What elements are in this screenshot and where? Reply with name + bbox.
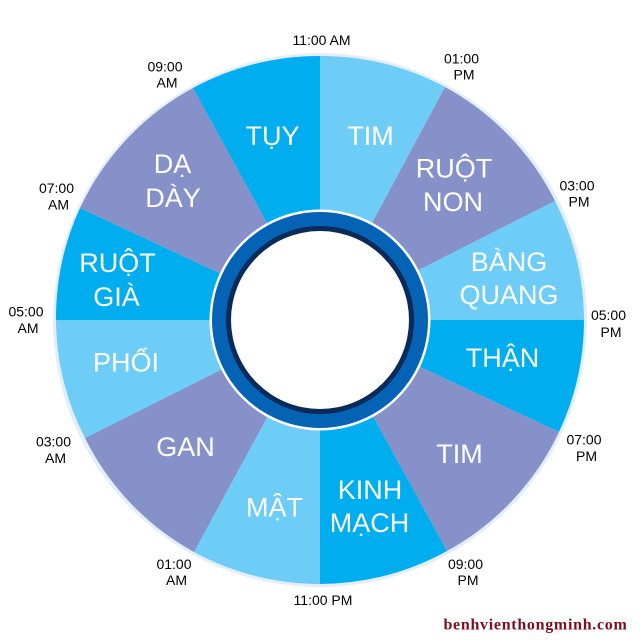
- time labels: 07:00: [39, 180, 74, 196]
- organ labels: QUANG: [459, 280, 559, 310]
- time labels: PM: [454, 66, 474, 82]
- segment: PHỔI: [56, 320, 320, 438]
- time labels: PM: [458, 572, 478, 588]
- time labels: 11:00 AM: [292, 32, 351, 48]
- time labels: AM: [45, 450, 66, 466]
- time labels: AM: [18, 320, 38, 336]
- organ labels: NON: [423, 187, 483, 217]
- time labels: 07:00: [566, 432, 602, 448]
- organ labels: MẬT: [246, 492, 303, 522]
- organ labels: DÀY: [145, 183, 201, 213]
- organ labels: [79, 121, 559, 538]
- segment: TIM: [320, 56, 445, 320]
- organ labels: GIÀ: [93, 282, 140, 312]
- segment: TỤY: [193, 56, 320, 320]
- segment: MẬT: [194, 320, 320, 584]
- time labels: PM: [600, 324, 622, 340]
- time labels: PM: [576, 448, 597, 464]
- organ labels: KINH: [338, 475, 402, 505]
- organ labels: PHỔI: [93, 346, 159, 378]
- segment: GAN: [85, 320, 320, 552]
- organ labels: TỤY: [246, 121, 300, 151]
- organ labels: MẠCH: [330, 508, 409, 538]
- segment: TIM: [320, 320, 559, 551]
- organ labels: RUỘT: [79, 247, 156, 278]
- organ labels: THẬN: [466, 342, 539, 373]
- time labels: 11:00 PM: [294, 592, 352, 608]
- segment: BÀNG QUANG: [320, 201, 584, 320]
- organ labels: DẠ: [154, 149, 191, 179]
- time labels: AM: [48, 196, 69, 212]
- segment: THẬN: [320, 320, 584, 432]
- time labels: PM: [568, 194, 590, 210]
- center hub: [210, 210, 430, 430]
- organ labels: GAN: [156, 432, 215, 462]
- organ labels: TIM: [436, 439, 483, 469]
- time labels: 03:00: [559, 178, 595, 194]
- time labels: 03:00: [36, 434, 71, 450]
- time labels: AM: [156, 74, 178, 90]
- time labels: 09:00: [448, 556, 483, 572]
- segment: KINH MẠCH: [320, 320, 447, 584]
- organ labels: BÀNG: [471, 247, 547, 277]
- time labels: AM: [166, 572, 187, 588]
- segment: DẠ DÀY: [80, 88, 320, 320]
- time labels: 09:00: [147, 58, 183, 74]
- clock wheel: [53, 53, 587, 587]
- watermark: benhvienthongminh.com: [443, 616, 628, 634]
- time labels: 01:00: [444, 50, 479, 66]
- time labels: 05:00: [8, 304, 44, 320]
- organ labels: RUỘT: [416, 152, 492, 184]
- time labels: 05:00: [591, 307, 626, 323]
- segment: RUỘT NON: [320, 87, 555, 320]
- organ labels: TIM: [347, 121, 394, 151]
- segment: RUỘT GIÀ: [56, 208, 320, 320]
- time labels: 01:00: [156, 556, 192, 572]
